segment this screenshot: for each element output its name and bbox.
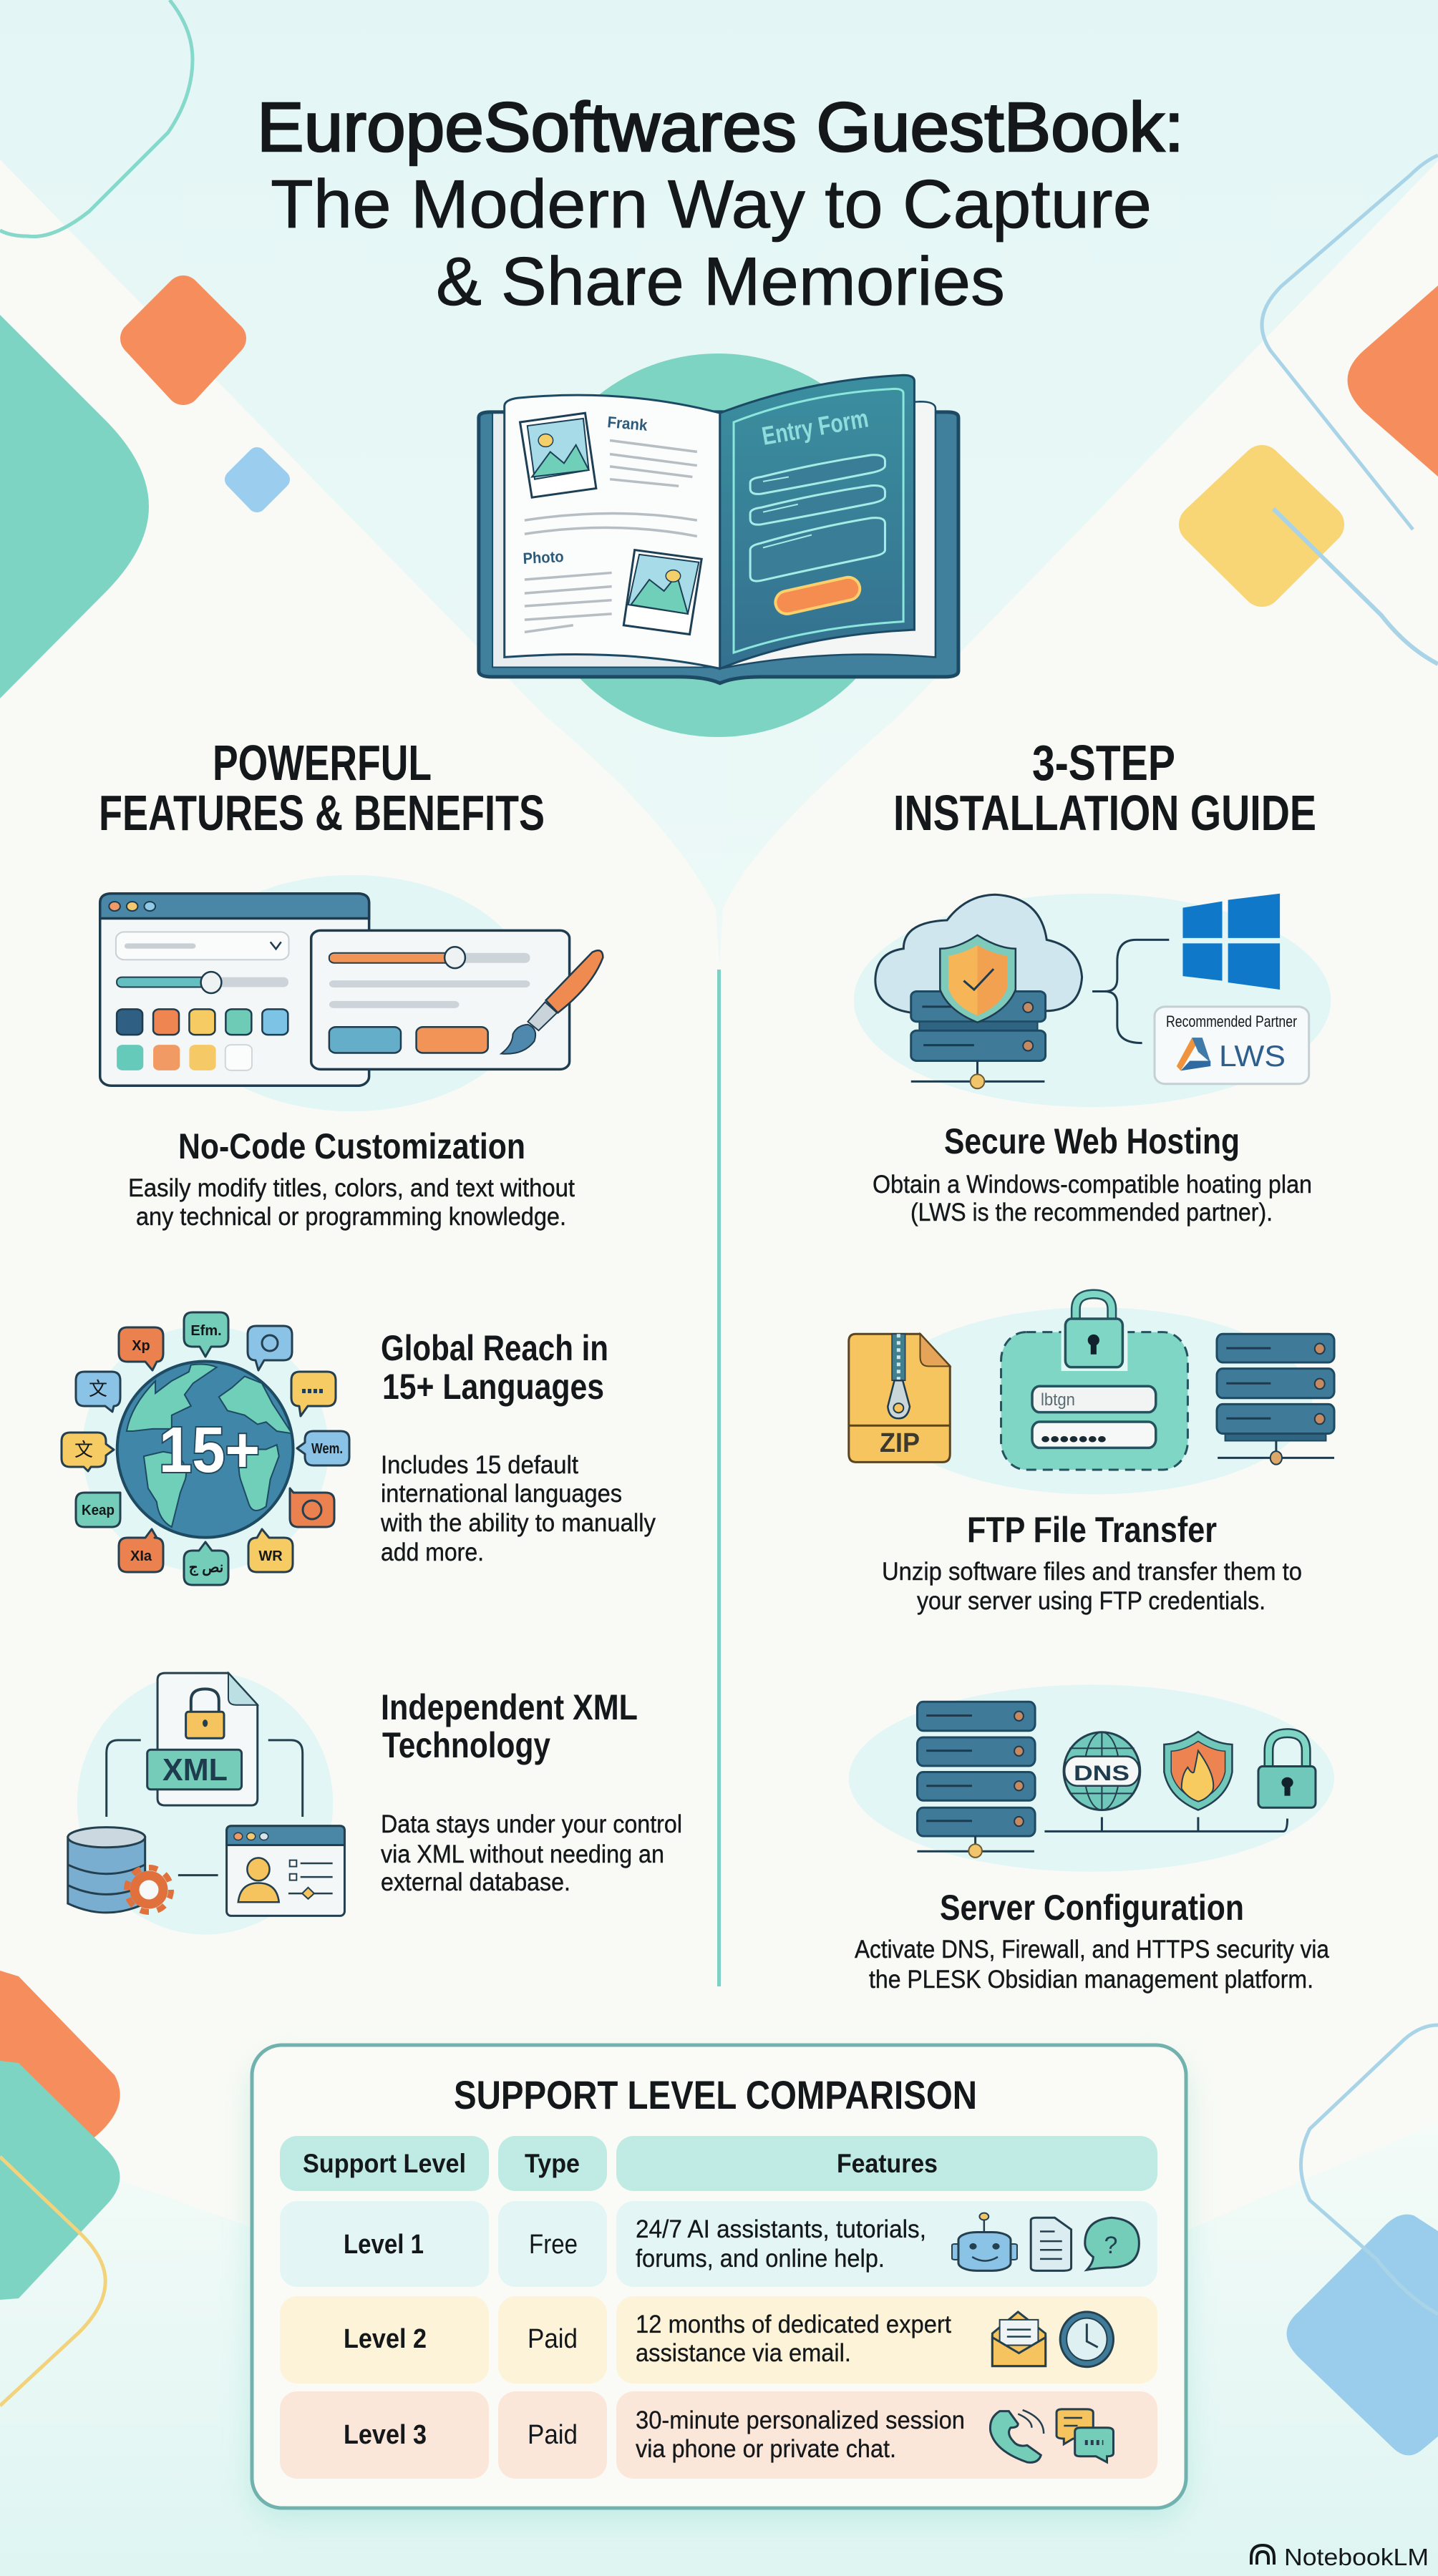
feature: no-code customization: [100, 875, 603, 1231]
step description: Activate DNS, Firewall, and HTTPS security via: [855, 1936, 1329, 1963]
feature description: [128, 1174, 575, 1231]
feature heading: [381, 1328, 608, 1407]
row: level 2: Level 2: [344, 2324, 427, 2354]
step 1: secure web hosting: [854, 894, 1331, 1226]
feature heading: Technology: [382, 1725, 550, 1765]
feature heading: Global Reach in: [381, 1328, 608, 1368]
decorative shapes: bottom right: [1287, 2025, 1438, 2455]
row: level 3: Paid: [528, 2420, 578, 2450]
icon: globe with language bubbles: Xp: [132, 1338, 150, 1354]
decorative shapes: top left: [0, 0, 281, 698]
title: EuropeSoftwares GuestBook:: [257, 88, 1184, 166]
heading: powerful features & benefits: FEATURES & BENEFITS: [99, 785, 545, 841]
heading: 3-step installation guide: INSTALLATION GUIDE: [893, 785, 1316, 841]
heading: 3-step installation guide: 3-STEP: [1032, 735, 1175, 791]
icon: globe with language bubbles: Efm.: [190, 1323, 222, 1339]
step description: Unzip software files and transfer them to: [882, 1558, 1302, 1586]
icon: open guest book: Entry Form: [759, 403, 870, 451]
icon: customization windows and brush: [100, 875, 603, 1111]
table header row: [280, 2136, 1157, 2191]
heading: 3-step installation guide: [893, 735, 1316, 841]
feature description: via XML without needing an: [381, 1840, 664, 1868]
heading: powerful features & benefits: POWERFUL: [213, 735, 432, 791]
feature description: add more.: [381, 1538, 484, 1566]
icon: globe with language bubbles: [62, 1312, 349, 1585]
icons: envelope, clock: [992, 2312, 1113, 2367]
feature heading: Independent XML: [381, 1687, 638, 1727]
icon: open guest book: Frank: [607, 413, 648, 434]
icon: globe with language bubbles: Wem.: [311, 1441, 343, 1457]
step heading: Server Configuration: [940, 1888, 1244, 1928]
row: level 2: Paid: [528, 2324, 578, 2354]
feature heading: No-Code Customization: [178, 1126, 525, 1166]
step description: the PLESK Obsidian management platform.: [869, 1966, 1313, 1994]
panel heading: SUPPORT LEVEL COMPARISON: [454, 2072, 977, 2117]
icon: XML file, database, profile: [68, 1672, 344, 1935]
table header row: Features: [837, 2149, 938, 2178]
icon: cloud server, Windows logo, LWS partner: [854, 894, 1331, 1107]
feature description: external database.: [381, 1868, 570, 1896]
icon: zip, credentials lock, server: [849, 1294, 1334, 1494]
row: level 3: Level 3: [344, 2420, 427, 2450]
row: level 1: Level 1: [344, 2230, 424, 2260]
feature description: [380, 1451, 656, 1566]
icons: robot, document, help: [952, 2213, 1139, 2270]
row: level 1: forums, and online help.: [636, 2245, 885, 2273]
icon: server, DNS, firewall, lock: [849, 1684, 1334, 1872]
feature description: Includes 15 default: [381, 1451, 578, 1479]
feature heading: 15+ Languages: [382, 1367, 604, 1407]
icon: zip, credentials lock, server: •••••••: [1041, 1428, 1107, 1451]
feature: global reach: [62, 1312, 656, 1585]
title: [257, 88, 1184, 320]
decorative shapes: bottom left: [0, 1971, 120, 2406]
step 3: server configuration: [849, 1684, 1334, 1994]
step 2: FTP file transfer: [849, 1294, 1334, 1615]
step description: [882, 1558, 1302, 1615]
icon: globe with language bubbles: 文: [74, 1439, 93, 1460]
row: level 3: 30-minute personalized session: [636, 2406, 965, 2434]
feature description: Easily modify titles, colors, and text without: [128, 1174, 575, 1202]
step description: [873, 1171, 1312, 1226]
icon: zip, credentials lock, server: ZIP: [880, 1428, 920, 1458]
icon: globe with language bubbles: XIa: [130, 1548, 152, 1564]
icon: globe with language bubbles: Keap: [82, 1503, 115, 1518]
feature heading: [381, 1687, 638, 1765]
icon: zip, credentials lock, server: lbtgn: [1041, 1390, 1075, 1410]
vertical divider: [717, 970, 721, 1986]
icon: globe with language bubbles: WR: [258, 1548, 283, 1564]
title: The Modern Way to Capture: [271, 166, 1152, 243]
panel: support level comparison: [252, 2045, 1186, 2519]
step description: [855, 1936, 1329, 1994]
row: level 1: 24/7 AI assistants, tutorials,: [636, 2215, 926, 2243]
icon: open guest book: Photo: [523, 547, 564, 567]
row: level 3: [280, 2391, 1157, 2479]
icon: cloud server, Windows logo, LWS partner: LWS: [1219, 1039, 1286, 1073]
step heading: Secure Web Hosting: [944, 1121, 1240, 1161]
title: & Share Memories: [436, 243, 1005, 320]
row: level 2: 12 months of dedicated expert: [636, 2311, 951, 2338]
icon: globe with language bubbles: 15+: [159, 1415, 260, 1486]
row: level 1: ?: [1104, 2232, 1117, 2259]
table header row: Support Level: [303, 2149, 466, 2178]
step description: Obtain a Windows-compatible hoating plan: [873, 1171, 1312, 1199]
icon: open guest book: [479, 353, 958, 737]
decorative shapes: top right: [1199, 155, 1438, 664]
feature description: international languages: [381, 1480, 622, 1508]
step description: your server using FTP credentials.: [917, 1587, 1265, 1615]
NotebookLM attribution: NotebookLM: [1284, 2544, 1429, 2570]
row: level 2: assistance via email.: [636, 2339, 851, 2367]
feature description: [381, 1810, 682, 1896]
icon: globe with language bubbles: نص ج: [189, 1560, 223, 1576]
step heading: FTP File Transfer: [967, 1510, 1217, 1550]
row: level 2: [280, 2296, 1157, 2384]
step description: (LWS is the recommended partner).: [910, 1199, 1273, 1226]
icons: phone, chat: [990, 2409, 1113, 2462]
icon: globe with language bubbles: 文: [89, 1378, 107, 1400]
row: level 1: Free: [529, 2230, 578, 2260]
feature description: with the ability to manually: [380, 1509, 656, 1537]
icon: XML file, database, profile: XML: [162, 1752, 228, 1787]
feature description: any technical or programming knowledge.: [136, 1203, 566, 1231]
row: level 3: via phone or private chat.: [636, 2435, 896, 2463]
table header row: Type: [525, 2149, 580, 2178]
icon: server, DNS, firewall, lock: DNS: [1074, 1762, 1129, 1785]
feature: independent XML technology: [68, 1672, 682, 1935]
icon: cloud server, Windows logo, LWS partner: Recommended Partner: [1166, 1013, 1297, 1030]
row: level 1: [280, 2201, 1157, 2287]
feature description: Data stays under your control: [381, 1810, 682, 1838]
heading: powerful features & benefits: [99, 735, 545, 841]
